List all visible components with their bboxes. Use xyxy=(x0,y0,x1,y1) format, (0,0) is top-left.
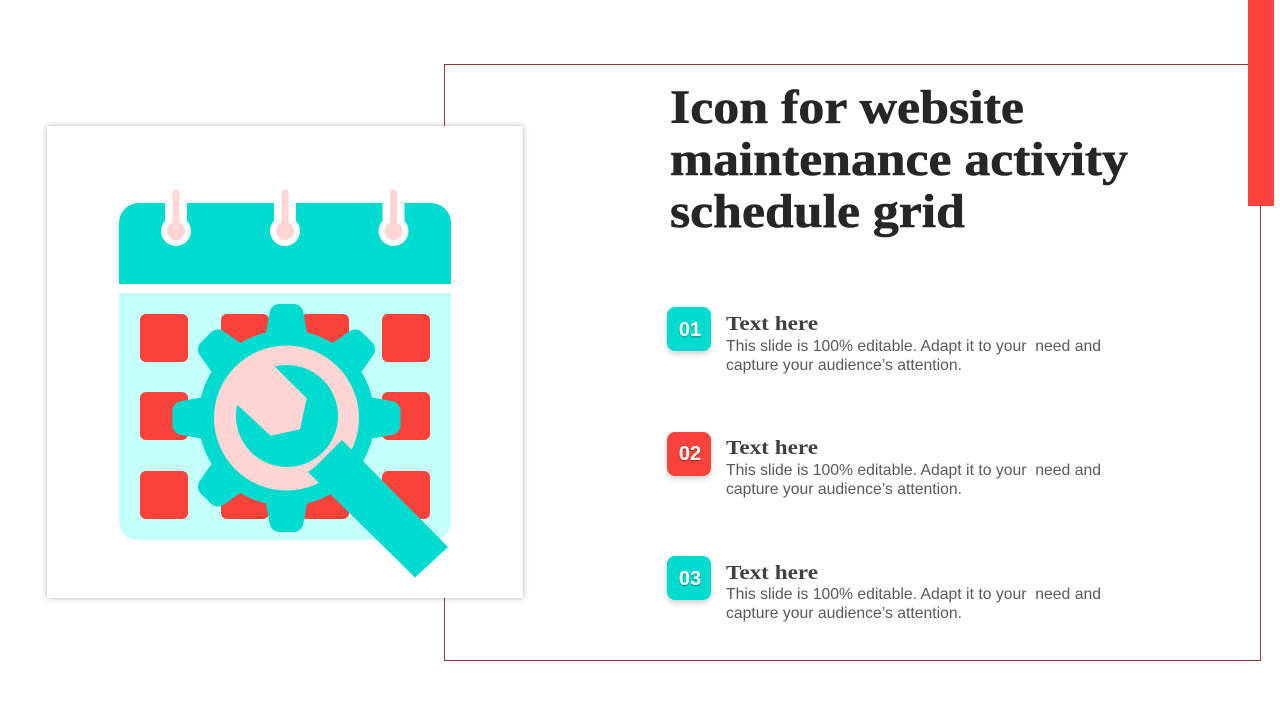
calendar header xyxy=(119,203,451,284)
heading 03: Text here xyxy=(726,563,818,584)
wrench xyxy=(236,365,338,467)
body text 02: This slide is 100% editable. Adapt it to your need and xyxy=(726,462,1101,479)
title: Icon for website xyxy=(670,82,1024,134)
magnifier handle xyxy=(308,440,448,578)
body text 01: capture your audience’s attention. xyxy=(726,357,962,374)
badge 01: 01 xyxy=(679,319,701,341)
badge 03: 03 xyxy=(679,568,701,590)
body text 03 xyxy=(726,586,1101,622)
heading 02: Text here xyxy=(726,438,818,459)
calendar body xyxy=(119,293,451,540)
body text 02: capture your audience’s attention. xyxy=(726,481,962,498)
list item 03 xyxy=(667,556,1101,622)
body text 01 xyxy=(726,338,1101,374)
badge 02 xyxy=(667,432,711,476)
title: schedule grid xyxy=(670,186,965,238)
list item 02 xyxy=(667,432,1101,498)
outline frame xyxy=(444,64,1260,660)
body text 03: capture your audience’s attention. xyxy=(726,605,962,622)
body text 02 xyxy=(726,462,1101,498)
body text 03: This slide is 100% editable. Adapt it to your need and xyxy=(726,586,1101,603)
body text 01: This slide is 100% editable. Adapt it to your need and xyxy=(726,338,1101,355)
gear xyxy=(182,314,390,522)
magnifier lens xyxy=(214,346,359,490)
badge 02: 02 xyxy=(679,443,701,465)
red accent bar xyxy=(1248,0,1274,206)
icon: calendar with gear, wrench and magnifier xyxy=(119,190,451,578)
badge 03 xyxy=(667,556,711,600)
panel: icon card xyxy=(47,126,523,598)
title xyxy=(670,82,1128,238)
list item 01 xyxy=(667,307,1101,374)
heading 01: Text here xyxy=(726,314,818,335)
calendar binding rings xyxy=(161,190,408,246)
title: maintenance activity xyxy=(670,134,1128,186)
calendar date squares xyxy=(140,314,430,519)
badge 01 xyxy=(667,307,711,351)
